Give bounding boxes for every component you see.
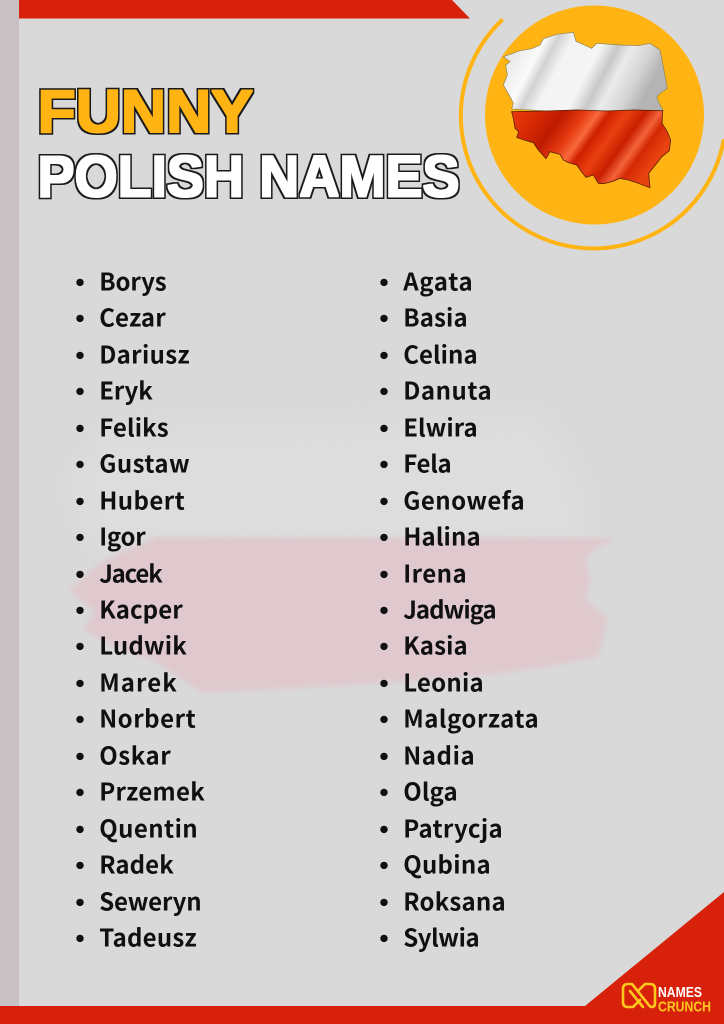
name list: right column: Irena: [403, 554, 467, 589]
name list: right column: Genowefa: [403, 481, 525, 516]
logo: Names Crunch: CRUNCH: [658, 998, 711, 1016]
name list: left column: Seweryn: [99, 882, 202, 917]
name list: right column: [380, 262, 539, 953]
name list: left column: Norbert: [99, 699, 196, 734]
name list: left column: Borys: [99, 262, 167, 297]
name list: right column: Qubina: [403, 845, 491, 880]
name list: right column: Fela: [403, 444, 452, 479]
name list: right column: Sylwia: [403, 918, 480, 953]
icon: N logo mark: [623, 984, 655, 1007]
title: [38, 78, 460, 210]
name list: right column: Halina: [403, 517, 481, 552]
icon: Poland map, white half: [503, 32, 667, 111]
name list: right column: Jadwiga: [403, 590, 497, 625]
name list: left column: [76, 262, 205, 953]
name list: right column: Olga: [403, 772, 458, 807]
name list: right column: Kasia: [403, 626, 468, 661]
name list: left column: Quentin: [99, 809, 198, 844]
title line: FUNNY: FUNNY: [38, 78, 253, 145]
icon: Poland map, red half: [512, 110, 671, 188]
name list: left column: Cezar: [99, 298, 166, 333]
name list: left column: Hubert: [99, 481, 185, 516]
yellow circle with Poland flag map: [485, 6, 704, 224]
name list: right column: Basia: [403, 298, 468, 333]
decorative yellow ring: [461, 20, 724, 248]
logo: Names Crunch: [623, 984, 711, 1016]
name list: left column: Radek: [99, 845, 174, 880]
bottom red band and corner: [0, 892, 724, 1024]
name list: left column: Ludwik: [99, 626, 187, 661]
name list: right column: Danuta: [403, 371, 492, 406]
name list: right column: Malgorzata: [403, 699, 539, 734]
name list: left column: Kacper: [99, 590, 183, 625]
title line: POLISH NAMES: POLISH NAMES: [38, 144, 460, 210]
name list: left column: Eryk: [99, 371, 153, 406]
name list: right column: Roksana: [403, 882, 506, 917]
name list: left column: Gustaw: [99, 444, 190, 479]
name list: left column: Feliks: [99, 408, 169, 443]
name list: right column: Leonia: [403, 663, 484, 698]
logo wordmark: NAMES: [658, 984, 702, 1001]
white brush stroke background: [70, 415, 590, 545]
left side band: [0, 0, 19, 1024]
name list: right column: Elwira: [403, 408, 478, 443]
name list: left column: Tadeusz: [99, 918, 197, 953]
name list: left column: Igor: [99, 517, 146, 552]
name list: left column: Jacek: [99, 554, 163, 589]
name list: right column: Celina: [403, 335, 478, 370]
name list: right column: Patrycja: [403, 809, 503, 844]
pink brush stroke: [69, 537, 617, 693]
name list: right column: Nadia: [403, 736, 475, 771]
name list: left column: Dariusz: [99, 335, 190, 370]
top red banner: [19, 0, 470, 18]
name list: left column: Marek: [99, 663, 177, 698]
name list: right column: Agata: [402, 262, 473, 297]
name list: left column: Przemek: [99, 772, 205, 807]
name list: left column: Oskar: [99, 736, 171, 771]
